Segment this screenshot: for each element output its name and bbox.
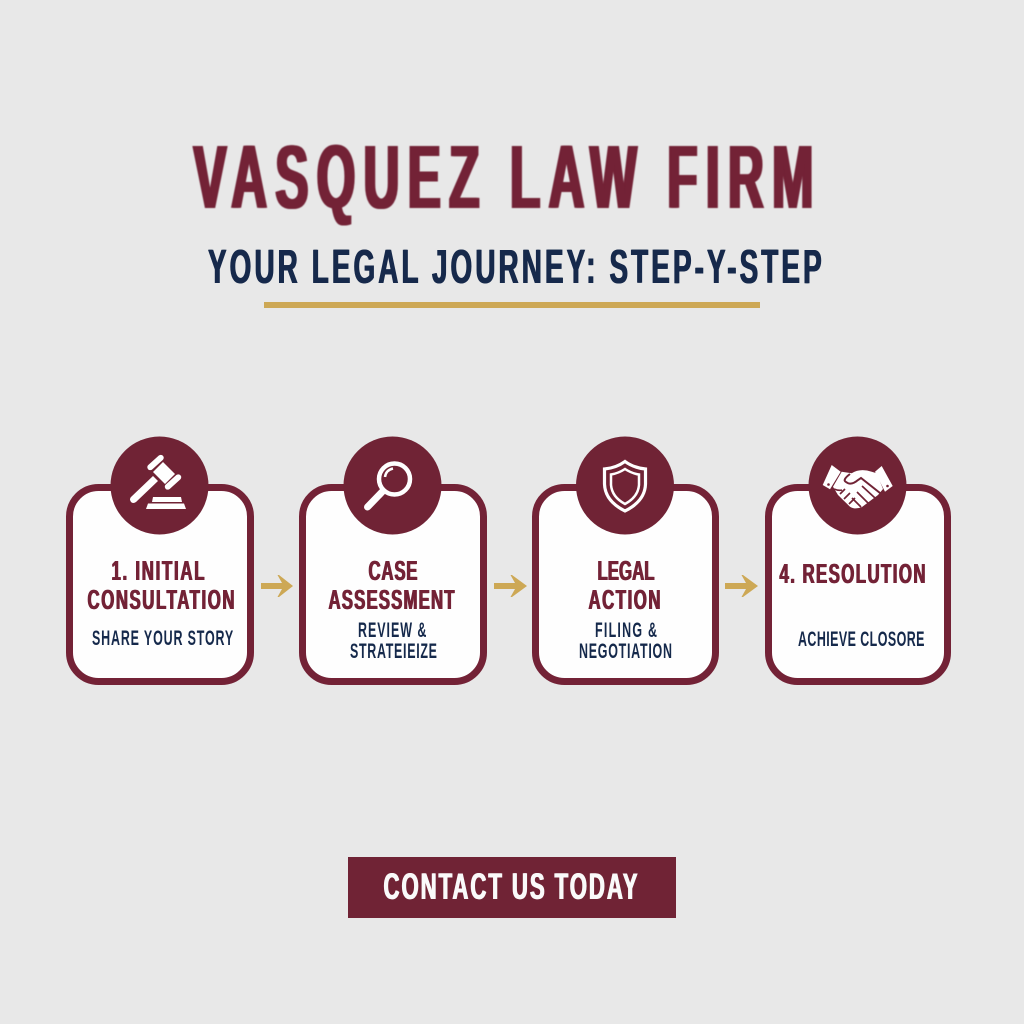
text: step 3 description	[579, 617, 672, 663]
text: step 3 description: NEGOTIATION	[579, 638, 672, 663]
title: VASQUEZ LAW FIRM	[193, 127, 813, 228]
icon: magnifying glass	[368, 464, 410, 507]
heading: step 4: 4. RESOLUTION	[779, 558, 925, 589]
heading: step 3	[588, 555, 660, 615]
heading: step 2	[328, 555, 454, 615]
text: step 1 description: SHARE YOUR STORY	[92, 625, 233, 650]
arrow: step 2 to 3	[494, 575, 527, 597]
text: step 4 description: ACHIEVE CLOSORE	[798, 626, 925, 651]
text: step 2 description	[350, 617, 437, 663]
text: step 2 description: STRATEIEIZE	[350, 638, 437, 663]
text: step 2 description: REVIEW &	[358, 617, 427, 642]
button: contact us today	[348, 857, 676, 918]
heading: step 1: CONSULTATION	[87, 584, 234, 615]
panel: step 4 resolution	[768, 436, 948, 682]
heading: step 2: CASE	[368, 555, 417, 586]
heading: step 2: ASSESSMENT	[328, 584, 454, 615]
heading: step 1: 1. INITIAL	[111, 555, 204, 586]
heading: step 1	[87, 555, 234, 615]
gold underline	[264, 302, 760, 308]
panel: step 1 initial consultation	[70, 436, 250, 682]
button: contact us today: CONTACT US TODAY	[383, 866, 637, 907]
arrow: step 1 to 2	[261, 575, 293, 597]
subtitle: YOUR LEGAL JOURNEY: STEP-Y-STEP	[208, 240, 821, 294]
arrow: step 3 to 4	[725, 575, 758, 597]
icon: gavel	[130, 454, 186, 509]
heading: step 3: LEGAL	[597, 555, 654, 586]
icon: handshake	[823, 465, 893, 508]
text: step 3 description: FILING &	[595, 617, 657, 642]
icon: shield	[604, 462, 646, 511]
panel: step 3 legal action	[536, 436, 716, 682]
heading: step 3: ACTION	[588, 584, 660, 615]
panel: step 2 case assessment	[302, 436, 484, 682]
